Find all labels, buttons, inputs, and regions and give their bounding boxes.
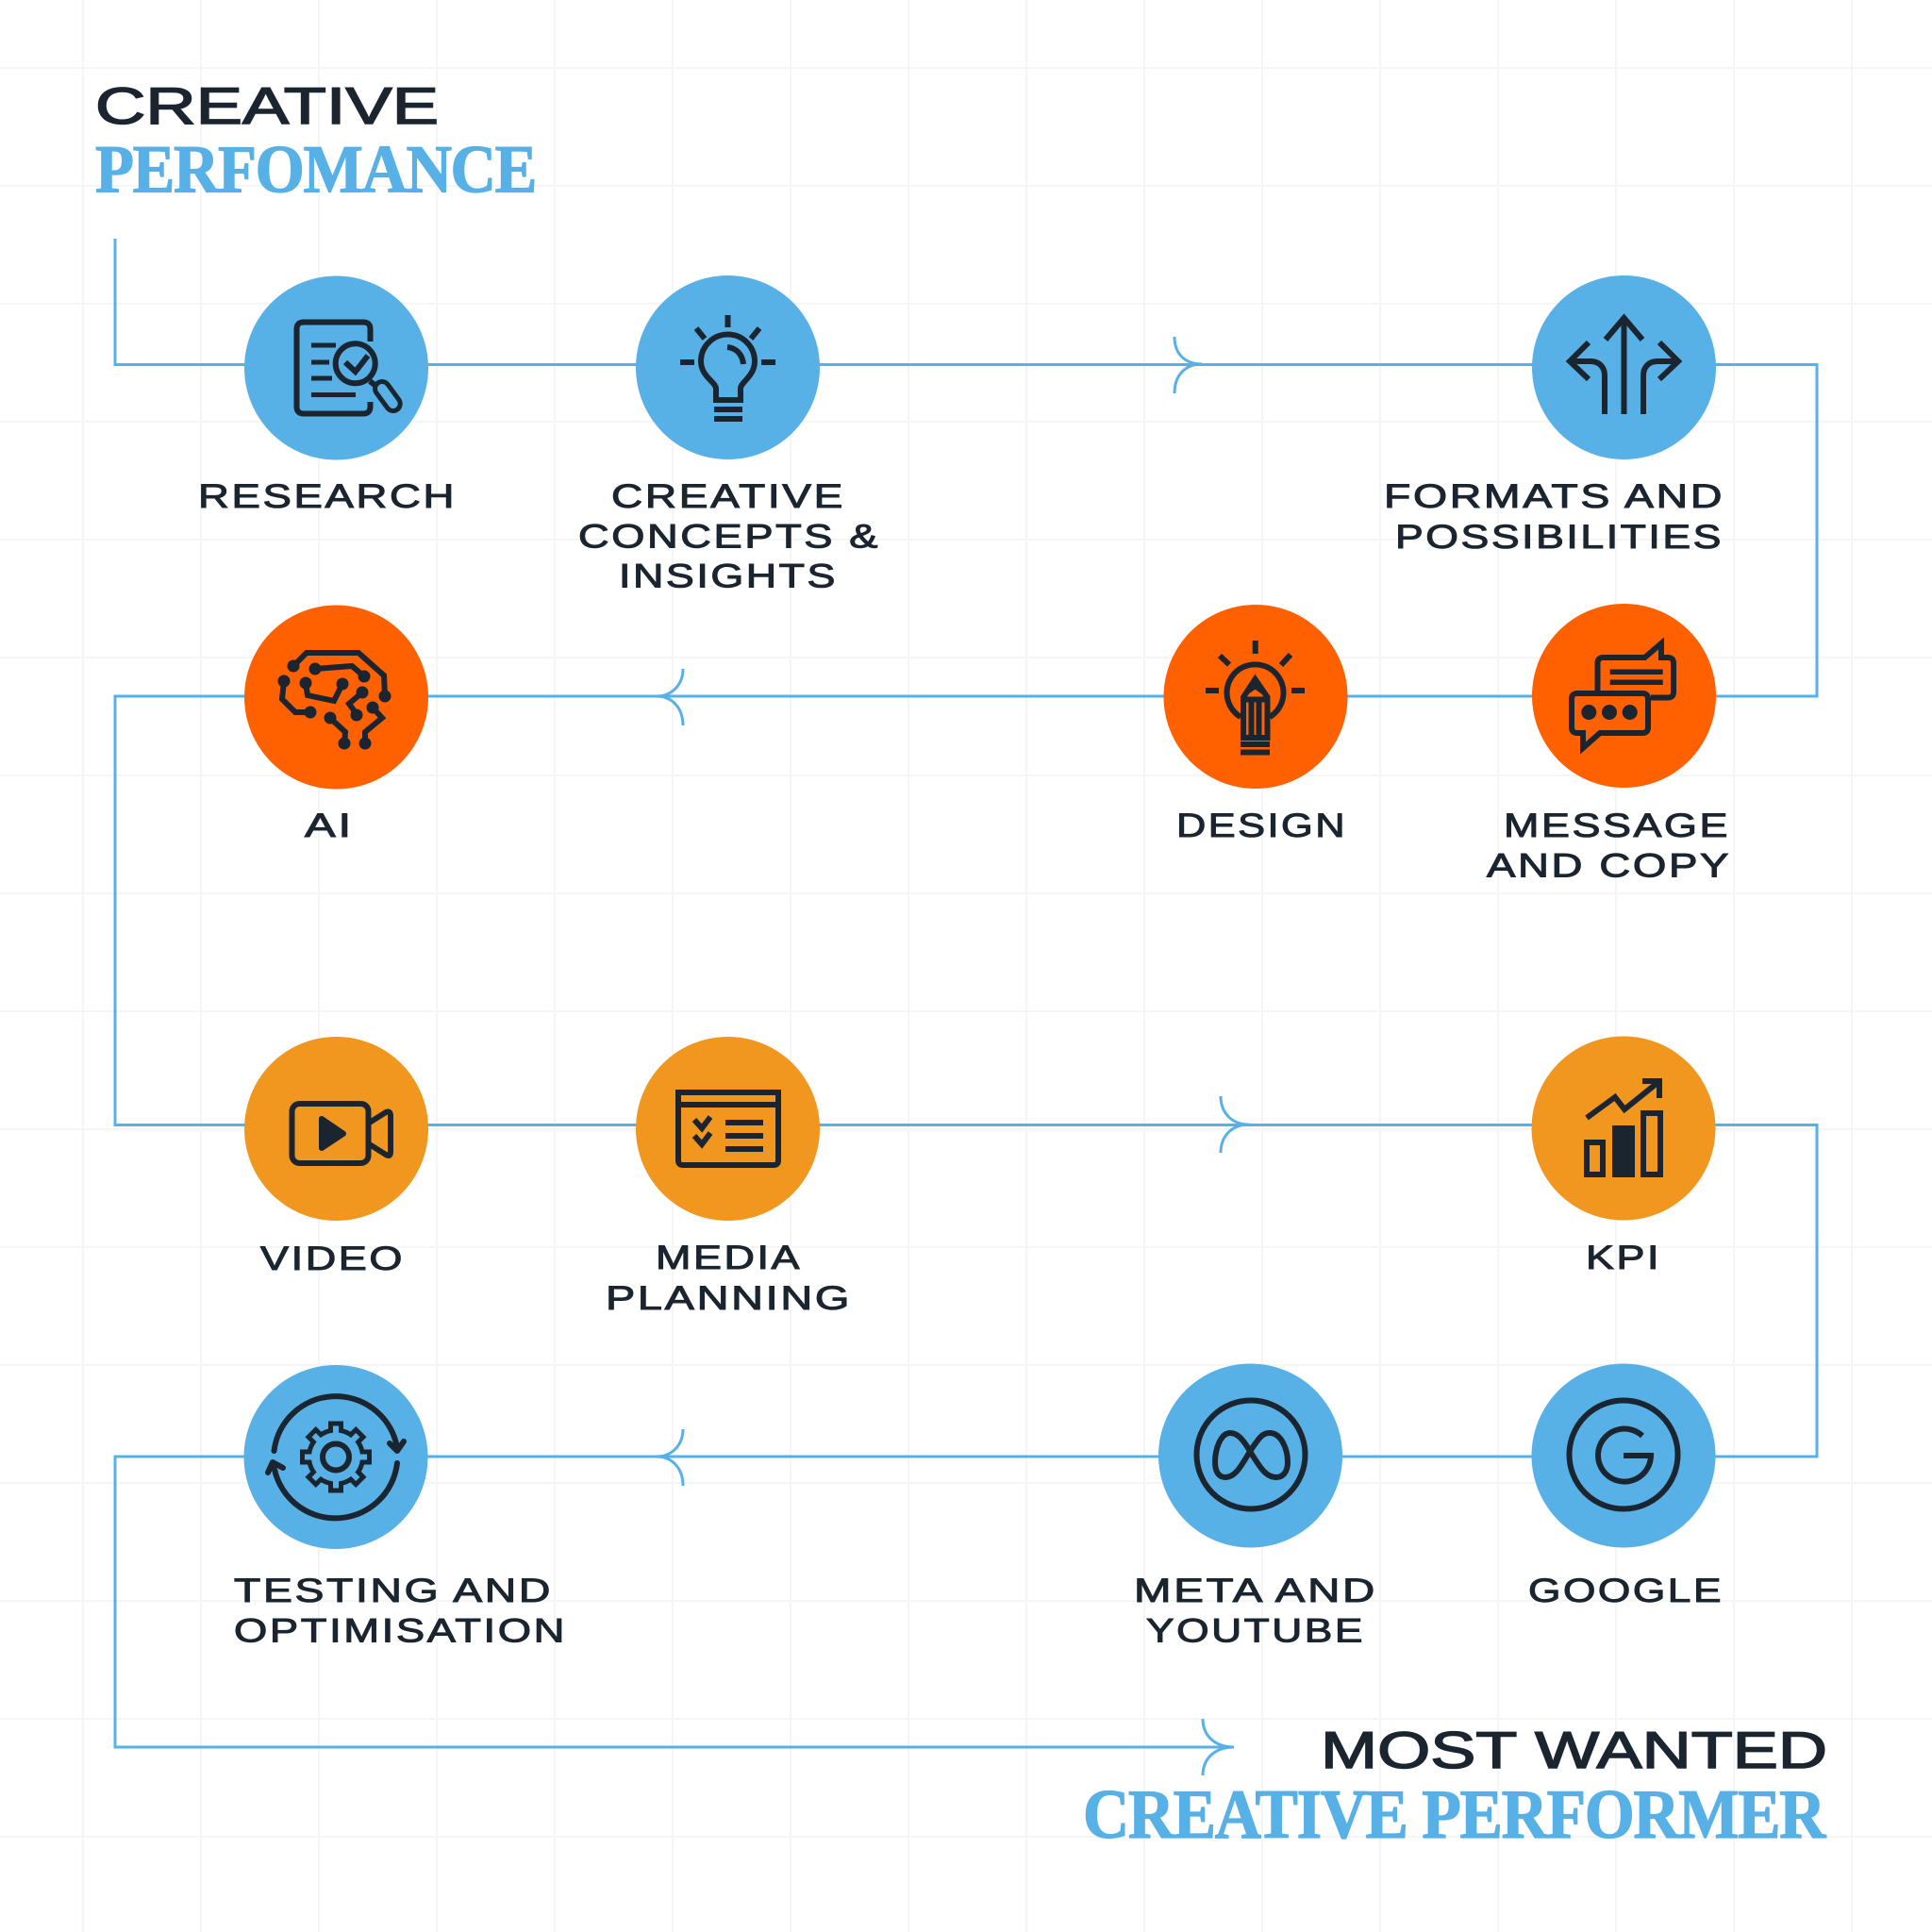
title: most wanted creative performer [1083,1721,1827,1854]
arrow: row 3 [1221,1096,1249,1153]
node: kpi [1532,1036,1715,1276]
icon: bar chart with arrow [1587,1078,1662,1177]
label: formats and possibilities: FORMATS AND [1384,478,1724,515]
title: creative performance [95,76,536,208]
label: media planning: MEDIA [656,1240,802,1276]
label: kpi: KPI [1586,1240,1661,1276]
icon: light bulb [680,315,775,422]
label: creative concepts and insights: CREATIVE [611,478,845,515]
arrow: row 4 [657,1429,683,1486]
label: message and copy: MESSAGE [1504,808,1730,844]
arrow: row 1 [1174,337,1202,393]
node: video [244,1037,428,1277]
node: meta and youtube [1134,1364,1377,1649]
label: media planning: PLANNING [606,1280,852,1317]
label: design: DESIGN [1176,808,1347,844]
label: message and copy: AND COPY [1487,847,1731,885]
label: testing and optimisation [234,1573,567,1649]
node: research [198,275,457,515]
label: google: GOOGLE [1528,1573,1724,1609]
icon: document with magnifier [296,323,393,413]
label: meta and youtube: YOUTUBE [1146,1613,1365,1649]
node: message and copy [1487,604,1731,885]
node: google [1528,1364,1724,1609]
node: testing and optimisation [234,1365,567,1649]
label: meta and youtube: META AND [1134,1573,1377,1609]
icon: chat bubbles [1572,643,1674,748]
icon: three arrows [1570,318,1678,414]
flow connector line [115,239,1817,1747]
arrow: row 2 [657,669,683,725]
arrow: final [1203,1719,1234,1775]
node: media planning [606,1037,852,1317]
node: design [1164,605,1347,844]
icon: meta logo [1196,1400,1306,1509]
title: most wanted creative performer: MOST WANTED [1321,1721,1827,1779]
icon: video camera [292,1104,391,1163]
label: video: VIDEO [260,1241,405,1277]
label: creative concepts and insights: CONCEPTS & [578,519,880,555]
node: formats [1384,275,1724,556]
label: meta and youtube [1134,1573,1377,1649]
icon: media plan window [678,1092,778,1165]
title: creative performance: CREATIVE [95,76,439,135]
label: creative concepts and insights: INSIGHTS [619,558,838,594]
label: formats and possibilities: POSSIBILITIES [1395,519,1724,556]
icon: circuit brain [277,653,391,749]
title: creative performance: PERFOMANCE [95,132,536,208]
label: media planning [606,1240,852,1317]
label: message and copy [1487,808,1731,885]
label: testing and optimisation: TESTING AND [234,1573,553,1609]
node: ai [244,606,428,844]
label: creative concepts and insights [578,478,880,594]
icon: google g [1570,1400,1677,1509]
icon: gear with cycle arrows [268,1396,404,1518]
label: ai: AI [305,808,354,844]
label: testing and optimisation: OPTIMISATION [234,1613,567,1649]
label: research: RESEARCH [198,478,457,515]
icon: pencil bulb [1206,641,1305,755]
title: most wanted creative performer: CREATIVE PERFORMER [1083,1776,1827,1854]
node: creative concepts [578,275,880,594]
label: formats and possibilities [1384,478,1724,556]
